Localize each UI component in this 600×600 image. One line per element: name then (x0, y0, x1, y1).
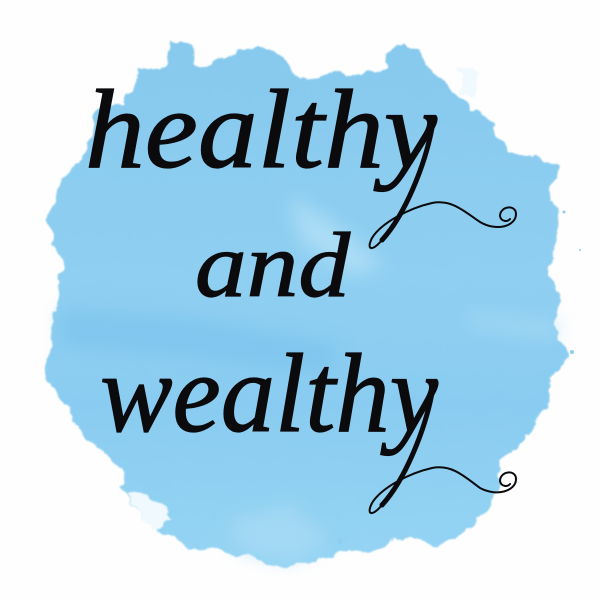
watercolor blob (46, 38, 581, 566)
edge splash top right (452, 70, 482, 100)
right pale streak (465, 312, 560, 340)
lettering: wealthy: wealthy (100, 332, 438, 456)
darker band (60, 310, 340, 375)
droplets (337, 210, 581, 544)
edge splash lower left (128, 494, 172, 530)
lettering: and: and (195, 214, 351, 316)
pale wash streak (290, 195, 385, 275)
flourish: healthy tail (370, 128, 516, 248)
flourish: wealthy tail (370, 393, 516, 513)
lower pale wash (230, 505, 330, 562)
lettering: healthy: healthy (85, 68, 437, 192)
